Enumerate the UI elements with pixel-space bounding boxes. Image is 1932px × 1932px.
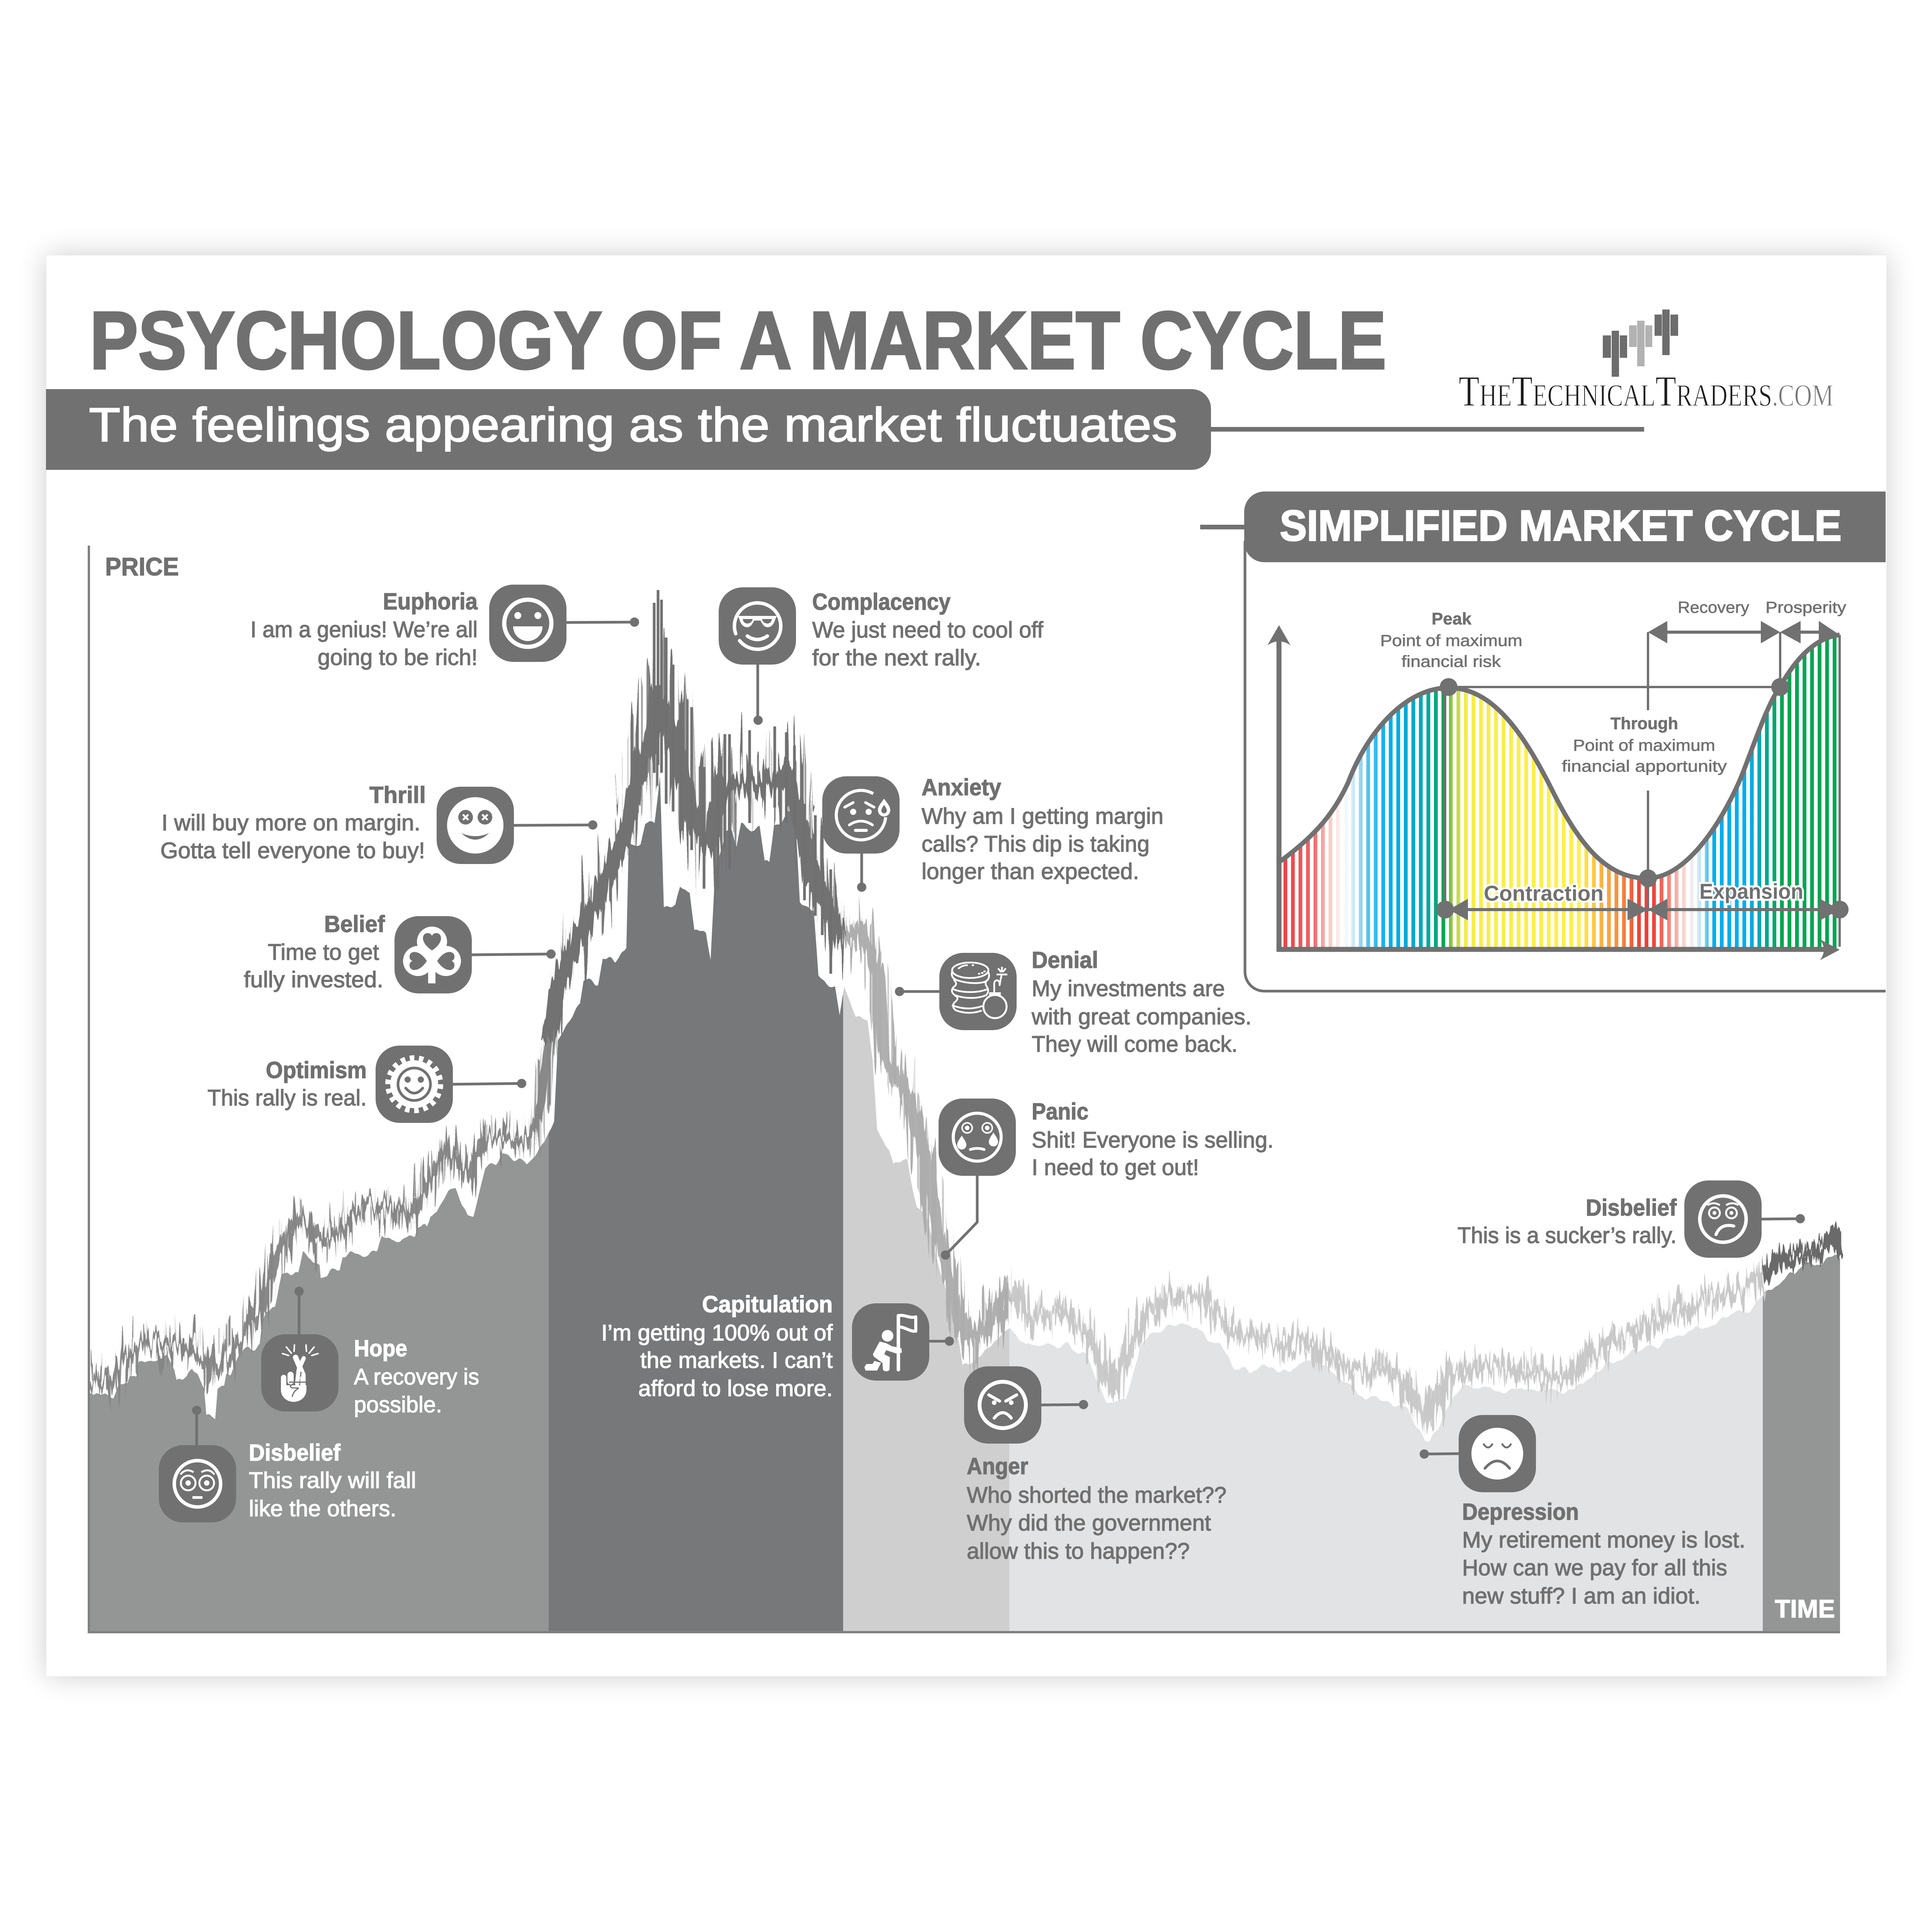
callout: Thrill <box>160 782 597 864</box>
callout: Hope <box>261 1287 479 1417</box>
subtitle banner <box>46 389 1644 470</box>
callout: Euphoria: going to be rich! <box>318 645 478 670</box>
label: prosperity: Prosperity <box>1765 598 1846 616</box>
price line: peak <box>549 590 843 1043</box>
label: through: financial apportunity <box>1562 757 1727 775</box>
callout: Anger: Why did the government <box>967 1510 1211 1536</box>
label: through: Point of maximum <box>1573 736 1715 754</box>
callout: Complacency <box>719 587 1044 725</box>
callout: Belief <box>244 911 556 993</box>
heading: simplified market cycle: SIMPLIFIED MARKET CYCLE <box>1280 502 1842 550</box>
callout: Anxiety: longer than expected. <box>922 859 1139 884</box>
panel: price chart <box>89 546 1840 1632</box>
callout: Depression: new stuff? I am an idiot. <box>1462 1583 1701 1609</box>
callout: Anger: allow this to happen?? <box>967 1539 1190 1564</box>
label: contraction: Contraction <box>1484 881 1604 905</box>
label: peak: financial risk <box>1401 652 1501 670</box>
subtitle banner: The feelings appearing as the market fluctuates <box>89 398 1177 452</box>
callout: Denial: Denial <box>1032 947 1098 973</box>
callout: Anxiety: Anxiety <box>922 774 1002 800</box>
price line: rise <box>90 1043 549 1381</box>
callout: Complacency: for the next rally. <box>812 645 981 670</box>
axis label: time: TIME <box>1775 1594 1835 1623</box>
logo: The Technical Traders <box>1459 310 1833 415</box>
callout: Disbelief (market bottom): Disbelief <box>1586 1195 1677 1221</box>
callout: Depression <box>1420 1415 1745 1609</box>
callout: Capitulation: I’m getting 100% out of <box>601 1320 833 1345</box>
label: peak <box>1380 609 1522 670</box>
white halo above area <box>90 560 1840 1443</box>
callout: Hope: A recovery is <box>354 1364 479 1389</box>
panel: white card <box>46 255 1886 1676</box>
price line: recovery <box>1763 1235 1840 1276</box>
callout: Panic: Panic <box>1032 1099 1088 1124</box>
striped cycle area <box>1280 635 1840 949</box>
callout: Capitulation: the markets. I can’t <box>640 1348 833 1373</box>
callout: Depression: Depression <box>1462 1499 1579 1525</box>
label: expansion: Expansion <box>1699 879 1803 903</box>
callout: Disbelief (early rally): like the others. <box>249 1496 396 1521</box>
label: through <box>1562 714 1727 775</box>
axes <box>89 546 1840 1632</box>
callout: Depression: My retirement money is lost. <box>1462 1527 1745 1553</box>
title: PSYCHOLOGY OF A MARKET CYCLE <box>90 294 1386 386</box>
callout: Disbelief (early rally): Disbelief <box>249 1440 341 1466</box>
callout: Denial <box>895 947 1252 1057</box>
callout: Euphoria: Euphoria <box>383 588 478 614</box>
callout: Denial: My investments are <box>1032 976 1225 1001</box>
price line: dense core <box>90 696 1840 1424</box>
callout: Belief: Belief <box>324 911 385 937</box>
price line: bottom <box>1009 1276 1763 1424</box>
callout: Capitulation: afford to lose more. <box>638 1376 833 1401</box>
callout: Euphoria: I am a genius! We’re all <box>250 617 478 642</box>
chart phase bands <box>89 734 1840 1632</box>
callout: Disbelief (market bottom) <box>1458 1180 1805 1258</box>
heading: simplified market cycle <box>1200 492 1886 562</box>
callout: Panic: Shit! Everyone is selling. <box>1032 1128 1274 1153</box>
callout: Panic: I need to get out! <box>1032 1155 1199 1180</box>
cycle curve <box>1280 635 1840 878</box>
callout: Optimism <box>207 1046 526 1123</box>
callout: Panic <box>939 1099 1274 1260</box>
callout: Depression: How can we pay for all this <box>1462 1555 1727 1580</box>
callout: Belief: Time to get <box>268 940 379 965</box>
axis label: price: PRICE <box>105 552 179 581</box>
callout: Anxiety <box>822 774 1163 892</box>
callout: Thrill: Gotta tell everyone to buy! <box>160 838 425 863</box>
callout: Anger: Who shorted the market?? <box>967 1483 1226 1508</box>
callout: Anger: Anger <box>967 1453 1028 1479</box>
callout: Anger <box>964 1366 1226 1564</box>
callout: Disbelief (market bottom): This is a sucker’s rally. <box>1458 1223 1677 1248</box>
callout: Hope: Hope <box>354 1335 407 1361</box>
callout: Anxiety: calls? This dip is taking <box>922 832 1150 857</box>
callout: Capitulation <box>601 1291 954 1401</box>
callout: Disbelief (early rally): This rally will fall <box>249 1468 416 1493</box>
callout: Optimism: This rally is real. <box>207 1085 367 1111</box>
callout: Complacency: Complacency <box>812 589 951 615</box>
callout: Thrill: Thrill <box>369 782 426 808</box>
callout: Hope: possible. <box>354 1392 442 1417</box>
label: recovery: Recovery <box>1678 598 1749 616</box>
logo: The Technical Traders: THETECHNICALTRADERS.COM <box>1459 367 1833 415</box>
label: peak: Peak <box>1432 609 1472 628</box>
guide lines <box>1445 632 1840 947</box>
callout: Optimism: Optimism <box>266 1057 367 1083</box>
callout: Anxiety: Why am I getting margin <box>922 804 1163 829</box>
callout: Disbelief (early rally) <box>159 1406 416 1522</box>
label: through: Through <box>1611 714 1678 733</box>
price line: fall <box>843 930 1009 1342</box>
label: peak: Point of maximum <box>1380 631 1522 650</box>
chart axes <box>1267 625 1840 960</box>
panel: simplified market cycle <box>1200 492 1886 991</box>
arrows and key points <box>1436 621 1849 920</box>
callout: Euphoria <box>250 585 639 670</box>
callout: Complacency: We just need to cool off <box>812 617 1044 643</box>
callout: Capitulation: Capitulation <box>702 1291 833 1317</box>
callout: Denial: with great companies. <box>1031 1004 1252 1029</box>
callout: Denial: They will come back. <box>1032 1032 1238 1057</box>
callout: Belief: fully invested. <box>244 967 383 992</box>
callout: Thrill: I will buy more on margin. <box>162 810 420 835</box>
